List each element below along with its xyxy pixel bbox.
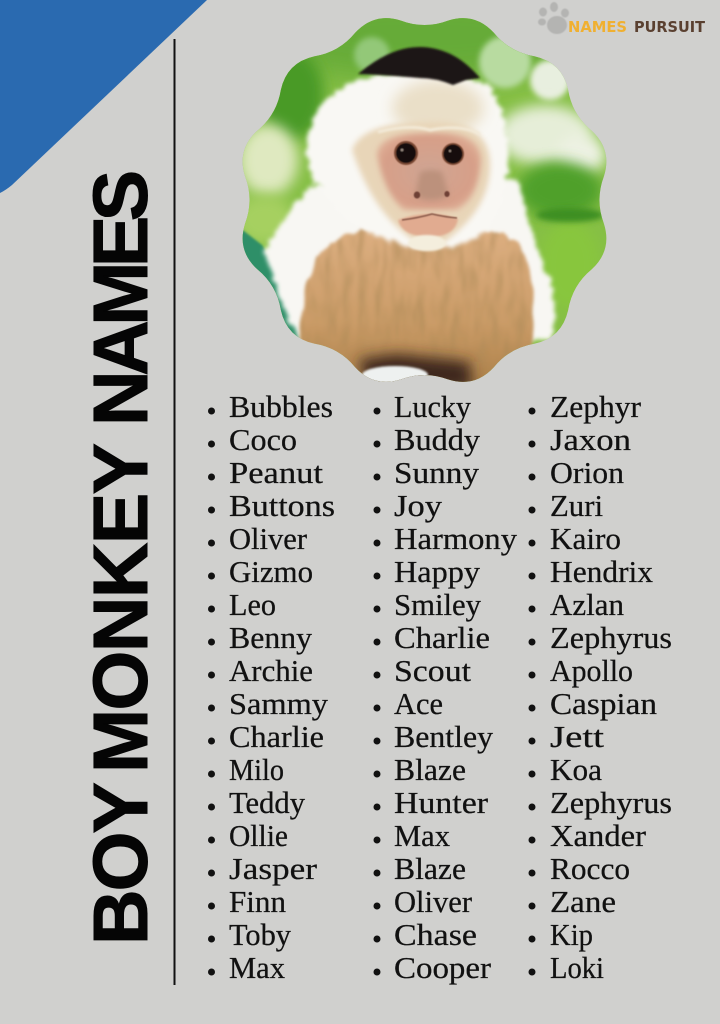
name list: column 2: Charlie [394, 620, 490, 655]
title: NAMES [78, 172, 164, 426]
name list: column 3: Zephyrus [550, 785, 672, 820]
name list: column 1: Teddy [229, 785, 305, 820]
logo: Names Pursuit [538, 2, 706, 36]
name list: column 2: Oliver [394, 884, 473, 919]
title [78, 172, 164, 945]
name list: column 3 [532, 389, 672, 985]
name list: column 2: Harmony [394, 521, 518, 556]
name list: column 1 [212, 389, 335, 985]
name list: column 3: Koa [550, 752, 602, 787]
name list: column 3: Jaxon [550, 422, 632, 457]
name list: column 2: Lucky [394, 389, 471, 424]
name list: column 3: Zephyr [550, 389, 642, 424]
muzzle and mouth [398, 214, 458, 237]
name list: column 3: Zephyrus [550, 620, 672, 655]
name list: column 1: Charlie [229, 719, 324, 754]
blue corner triangle [0, 0, 207, 193]
eyes [394, 141, 464, 165]
name list: column 2: Smiley [394, 587, 481, 622]
name list: column 1: Coco [229, 422, 297, 457]
name list: column 1: Toby [229, 917, 291, 952]
name list: column 2 [377, 389, 518, 985]
name list: column 1: Milo [229, 752, 284, 787]
white shoulder fur [264, 178, 555, 345]
dark fur under chest [358, 354, 472, 390]
name list: column 2: Joy [394, 488, 443, 523]
name list: column 3: Orion [550, 455, 625, 490]
name list: column 1: Archie [229, 653, 313, 688]
name list: column 3: Azlan [550, 587, 624, 622]
black cap [358, 47, 480, 85]
name list: column 3: Kairo [550, 521, 621, 556]
white perch [362, 366, 428, 384]
name list: column 3: Jett [550, 719, 604, 754]
photo background: green foliage bokeh [242, 18, 606, 382]
bullets column 2 [374, 411, 380, 973]
bullets column 1 [208, 411, 215, 973]
title: BOY [78, 782, 164, 945]
title: MONKEY [78, 443, 164, 773]
name list: column 3: Zane [550, 884, 616, 919]
name list: column 2: Scout [394, 653, 471, 688]
name list: column 1: Sammy [229, 686, 329, 721]
nose [414, 170, 450, 200]
logo wordmark: NAMES [568, 18, 627, 36]
white goatee [408, 235, 446, 251]
name list: column 2: Blaze [394, 752, 466, 787]
name list: column 3: Rocco [550, 851, 630, 886]
name list: column 1: Peanut [229, 455, 323, 490]
name list: column 1: Finn [229, 884, 286, 919]
name list: column 2: Hunter [394, 785, 489, 820]
name list: column 3: Xander [550, 818, 647, 853]
name list: column 1: Leo [229, 587, 276, 622]
name list: column 3: Caspian [550, 686, 658, 721]
name list: column 1: Jasper [229, 851, 318, 886]
name list: column 2: Happy [394, 554, 481, 589]
name list: column 2: Sunny [394, 455, 480, 490]
name list: column 2: Max [394, 818, 450, 853]
name list: column 1: Benny [229, 620, 313, 655]
name list: column 2: Blaze [394, 851, 466, 886]
white head fur [306, 73, 509, 248]
name list: column 3: Hendrix [550, 554, 653, 589]
logo wordmark: PURSUIT [634, 18, 706, 36]
icon: paw print [538, 2, 569, 34]
name list: column 3: Apollo [550, 653, 633, 688]
white brow [378, 127, 480, 134]
name list: column 2: Chase [394, 917, 477, 952]
bullets column 3 [528, 411, 536, 973]
tan chest fur [300, 230, 534, 395]
pink face [377, 133, 481, 210]
name list: column 3: Loki [550, 950, 604, 985]
name list: column 1: Buttons [229, 488, 335, 523]
name list: column 1: Bubbles [229, 389, 333, 424]
name list: column 2: Bentley [394, 719, 494, 754]
name list: column 1: Gizmo [229, 554, 313, 589]
name list: column 2: Ace [394, 686, 443, 721]
name list: column 3: Zuri [550, 488, 603, 523]
name list: column 1: Oliver [229, 521, 308, 556]
name list: column 1: Ollie [229, 818, 288, 853]
name list: column 2: Cooper [394, 950, 492, 985]
monkey photo in scalloped frame [242, 18, 606, 382]
cream forehead [392, 80, 484, 136]
vertical divider line [174, 39, 176, 985]
cream cheeks [352, 122, 490, 250]
name list: column 3: Kip [550, 917, 593, 952]
name list: column 2: Buddy [394, 422, 481, 457]
name list: column 1: Max [229, 950, 285, 985]
